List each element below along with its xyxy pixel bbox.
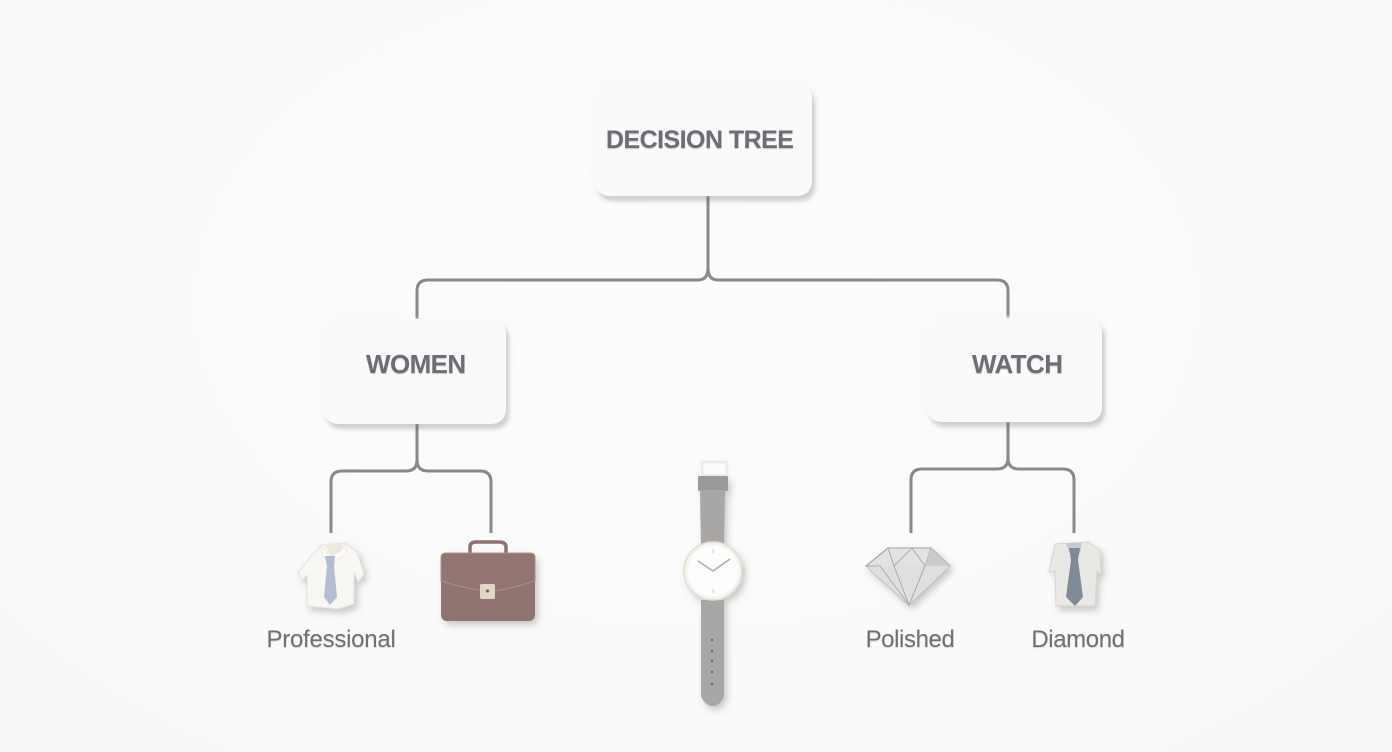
- root node: decision tree: [595, 84, 812, 196]
- node: watch: [927, 318, 1102, 422]
- root node: decision tree: DECISION TREE: [606, 126, 793, 154]
- icon: grey shirt with dark tie: [1049, 542, 1101, 606]
- label: polished: Polished: [866, 626, 954, 653]
- icon: brown briefcase: [441, 542, 535, 621]
- icon: white shirt with blue tie: [298, 543, 364, 609]
- watch buckle: [702, 462, 727, 476]
- node: women: [324, 320, 506, 424]
- icon: diamond: [866, 548, 950, 605]
- label: professional: Professional: [266, 626, 396, 653]
- label: diamond: Diamond: [1031, 626, 1125, 653]
- node: watch: WATCH: [972, 349, 1062, 379]
- node: women: WOMEN: [366, 349, 466, 379]
- icon: wristwatch: [684, 462, 745, 706]
